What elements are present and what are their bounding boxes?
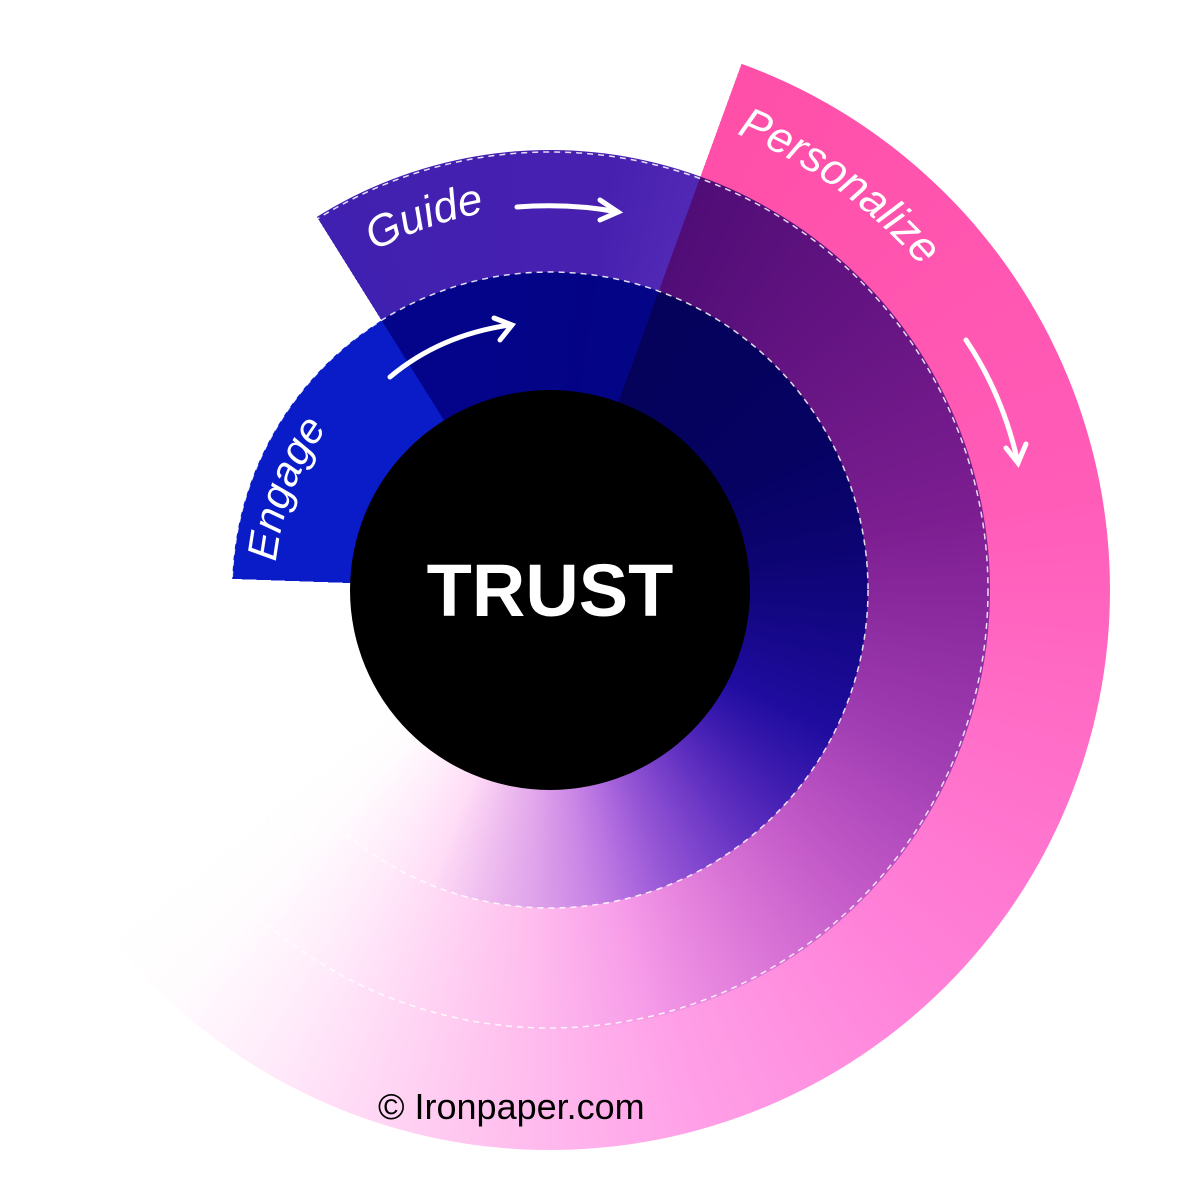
center circle: TRUST: TRUST: [427, 548, 673, 632]
label: Engage: Engage: [248, 420, 322, 561]
ring: guide: [110, 150, 990, 1030]
arrow: guide: [517, 200, 618, 220]
label: Guide: Guide: [368, 186, 480, 246]
center circle: TRUST: [350, 390, 750, 790]
label: Personalize: Personalize: [738, 108, 935, 261]
footer: copyright: © Ironpaper.com: [378, 1086, 645, 1127]
ring: engage: [232, 272, 868, 908]
arrow: engage: [390, 318, 512, 377]
arrow: personalize: [966, 340, 1026, 463]
